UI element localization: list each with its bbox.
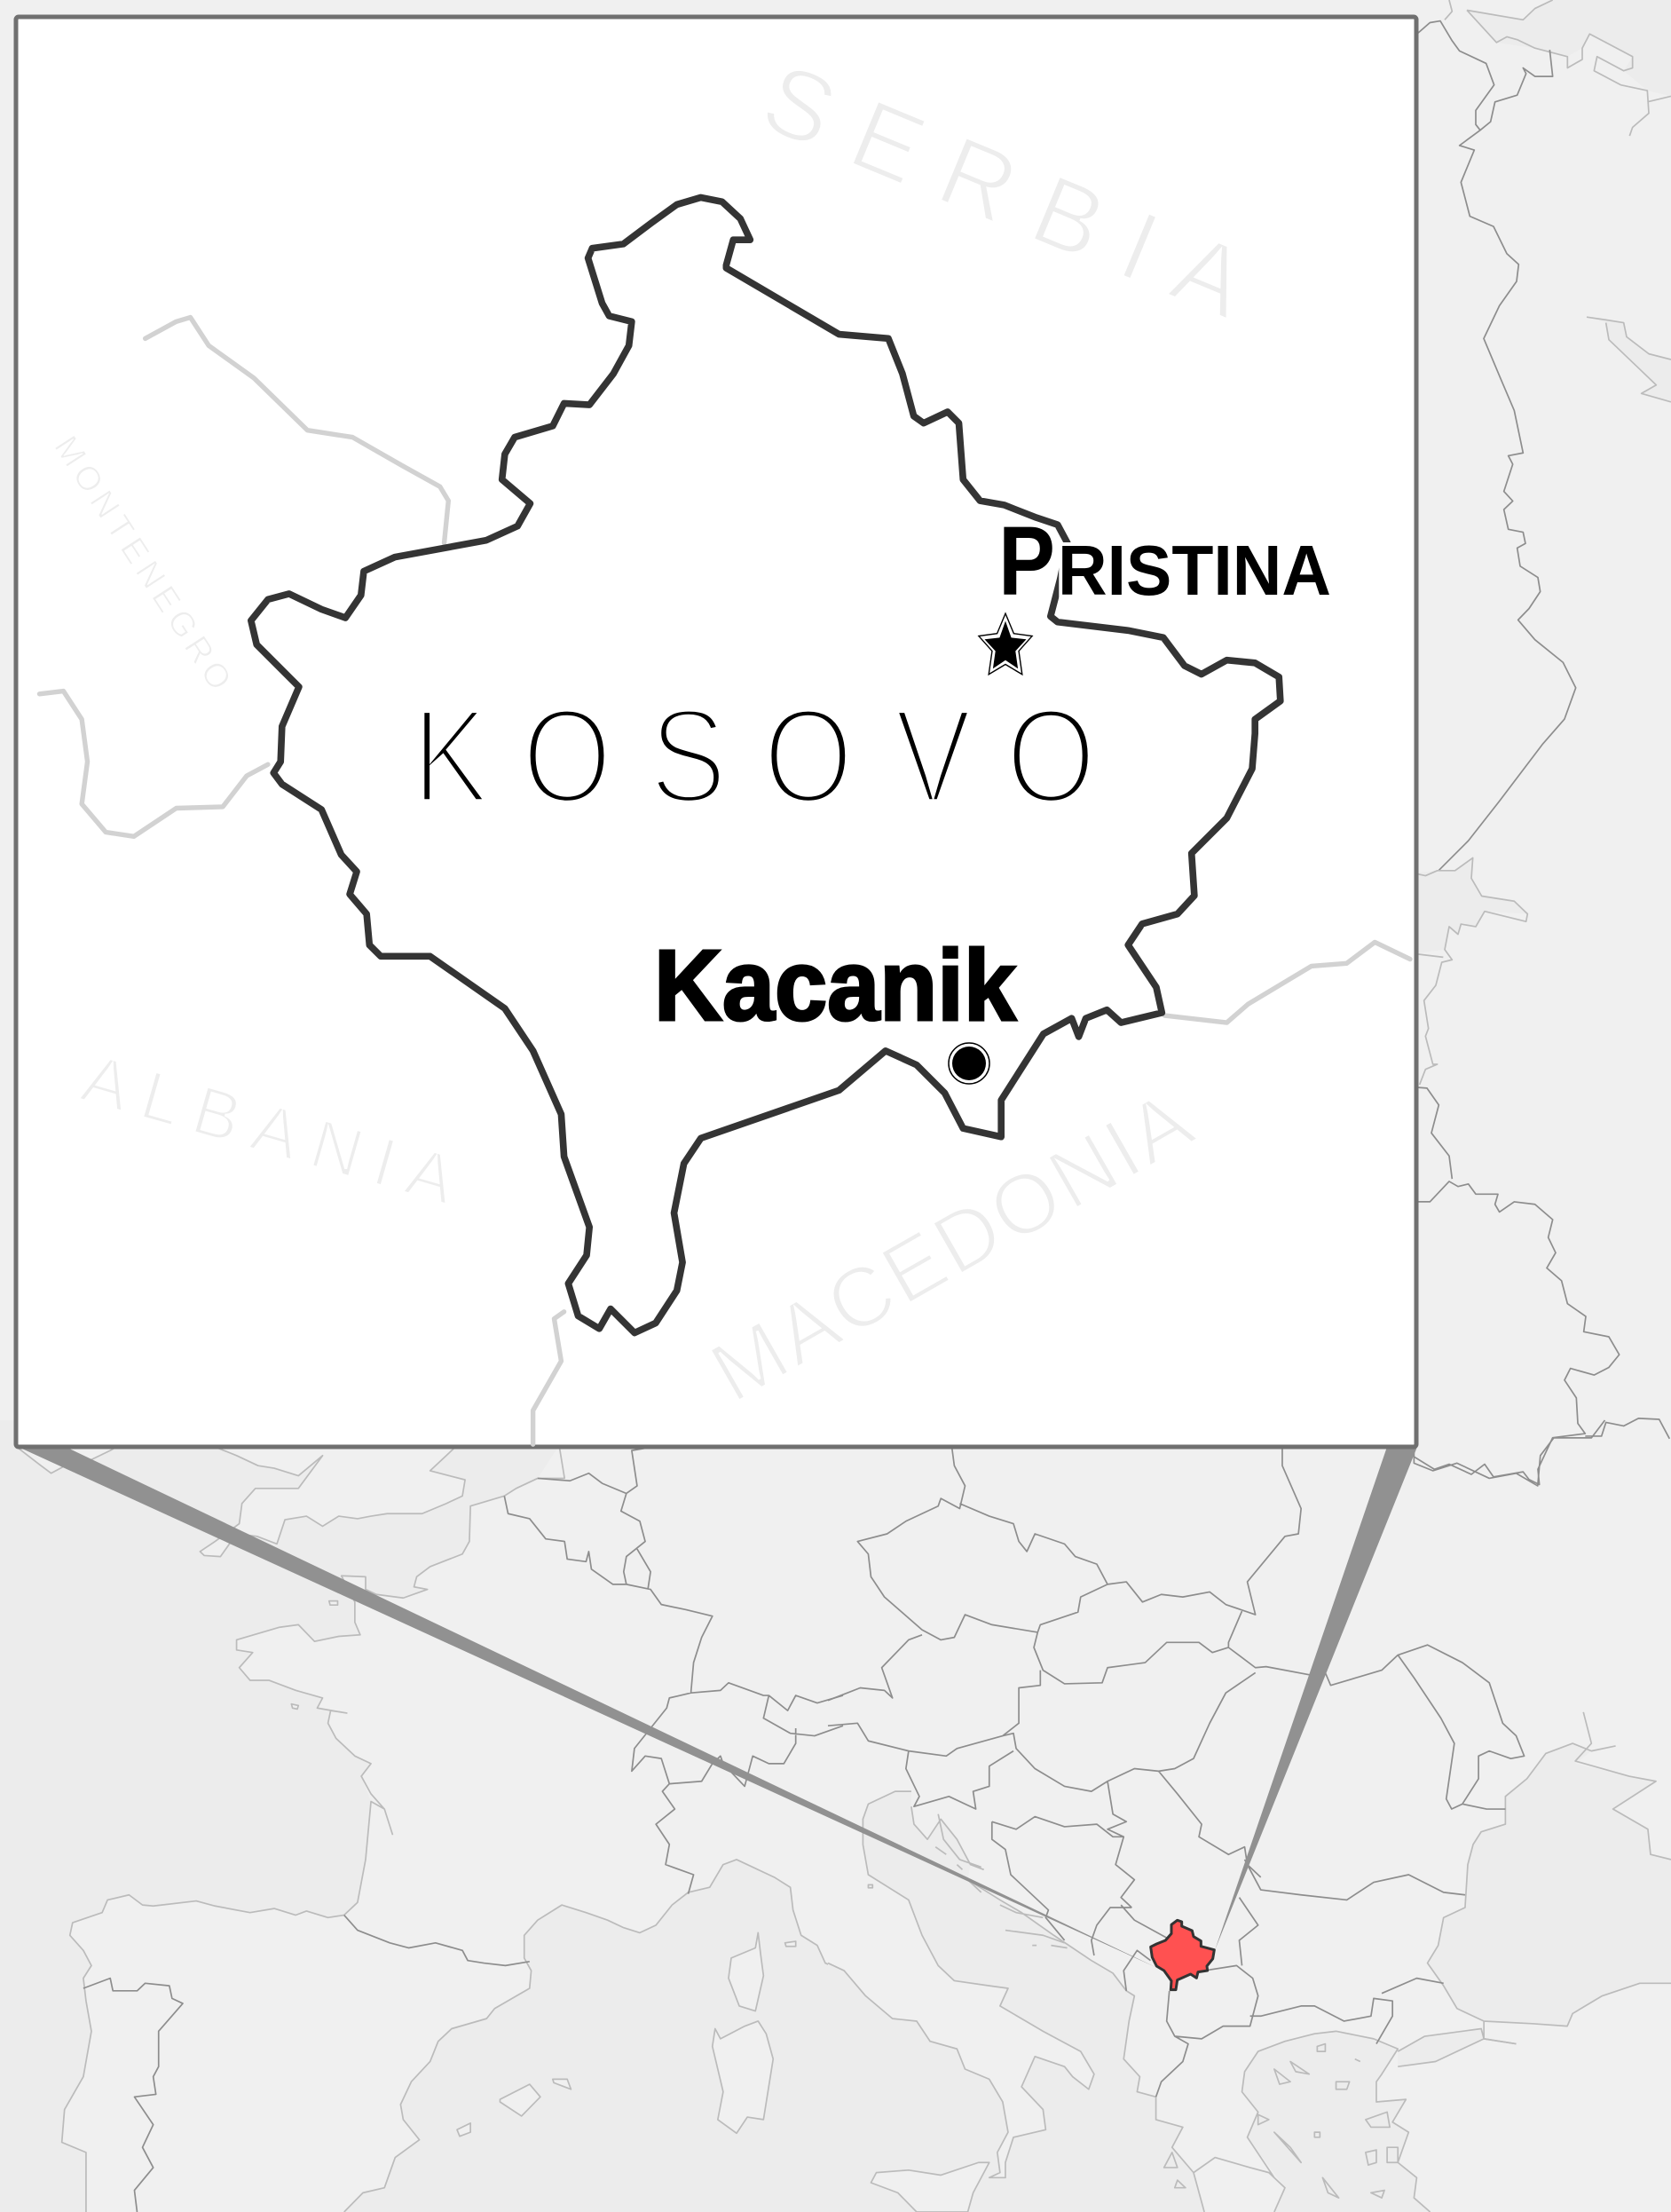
neighbouring borders in inset xyxy=(39,318,1410,1444)
label: MACEDONIA: MACEDONIA xyxy=(695,1072,1208,1420)
label: KOSOVO: KOSOVO xyxy=(412,682,1096,832)
islands: Corsica, Sardinia, Balearics xyxy=(291,1601,796,2137)
label: PRISTINA: RISTINA xyxy=(1058,531,1331,610)
label: ALBANIA: ALBANIA xyxy=(74,1039,464,1219)
zoom wedge: right xyxy=(1215,1447,1417,1950)
coastline: Netherlands and France xyxy=(62,1445,564,2212)
label: MONTENEGRO: MONTENEGRO xyxy=(46,430,238,697)
national borders xyxy=(828,1420,1604,2097)
coastline: Ireland fragments xyxy=(16,1420,123,1473)
label: Kacanik: Kacanik xyxy=(654,929,1016,1041)
base map: central Europe and Balkans xyxy=(828,1420,1671,2212)
coastline: Dalmatia, Albania, western Greece xyxy=(911,1806,1517,2212)
label: SERBIA: SERBIA xyxy=(748,42,1262,339)
icon: city marker xyxy=(949,1043,989,1084)
inset panel xyxy=(16,17,1416,1447)
coastline: Sicily xyxy=(871,2162,989,2212)
coastline: Italy west xyxy=(828,1791,1094,2177)
coastline: Great Britain xyxy=(200,1420,465,1557)
label: PRISTINA xyxy=(998,507,1331,616)
base map: Baltic states and Belarus border xyxy=(1414,0,1671,872)
icon: capital star xyxy=(979,613,1032,675)
coastline: Mediterranean France and Spain xyxy=(344,1860,843,2212)
label: PRISTINA: P xyxy=(998,507,1055,616)
Kosovo outline xyxy=(251,197,1281,1333)
coastline: Black Sea xyxy=(1428,1712,1671,2044)
zoom wedge: left xyxy=(14,1445,1157,1968)
base map: Lithuania, Poland, Ukraine borders xyxy=(1414,857,1669,1484)
coastline: islands in the Adriatic and Aegean xyxy=(868,1814,1398,2198)
base map: western Europe xyxy=(0,1420,843,2212)
borders: France, Benelux, Switzerland, Iberia xyxy=(83,1445,843,2212)
locator: Kosovo in red xyxy=(1151,1920,1214,1990)
